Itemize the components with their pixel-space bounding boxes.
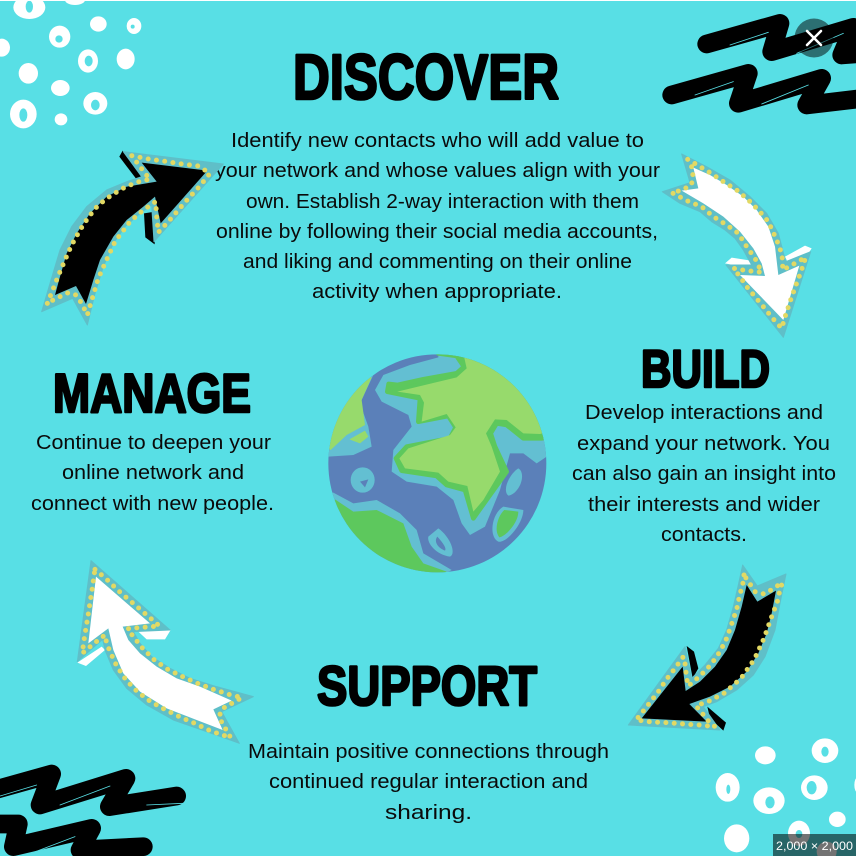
arrow: black, manage to discover <box>42 151 223 325</box>
text block: Discover description: online by following their social media accounts, <box>216 221 658 243</box>
image size badge: 2,000 × 2,000 <box>776 839 853 853</box>
text block: Build description: can also gain an insight into <box>572 463 836 485</box>
text block: Support description <box>248 741 609 824</box>
heading: Support: SUPPORT <box>317 654 537 717</box>
text block: Support description: Maintain positive connections through <box>248 741 609 763</box>
text block: Discover description: your network and whose values align with your <box>215 160 660 182</box>
arrow: white, support to manage <box>77 561 253 743</box>
close button overlay <box>794 18 834 58</box>
image size badge <box>773 834 856 856</box>
heading: Manage: MANAGE <box>53 362 251 424</box>
decorative black brush scribble: top right <box>672 23 856 105</box>
illustration: globe <box>328 354 546 572</box>
text block: Discover description: Identify new contacts who will add value to <box>231 130 644 152</box>
arrow: black, build to support <box>628 565 786 731</box>
text block: Manage description: Continue to deepen your <box>36 432 271 454</box>
text block: Discover description: activity when appropriate. <box>312 281 562 303</box>
text block: Manage description: connect with new people. <box>31 493 274 515</box>
text block: Manage description <box>31 432 274 515</box>
arrow: white, discover to build <box>662 154 812 337</box>
decorative white dots: top left <box>0 0 141 128</box>
decorative black brush scribble: bottom left <box>0 774 183 855</box>
text block: Support description: sharing. <box>385 802 472 824</box>
text block: Build description: expand your network. You <box>577 433 830 455</box>
decorative white dots: bottom right <box>716 738 856 856</box>
heading: Build: BUILD <box>641 340 770 399</box>
text block: Build description: contacts. <box>661 524 747 546</box>
text block: Discover description <box>215 130 660 303</box>
text block: Support description: continued regular interaction and <box>269 771 588 793</box>
text block: Build description: Develop interactions and <box>585 402 823 424</box>
text block: Build description: their interests and wider <box>588 494 820 516</box>
text block: Build description <box>572 402 836 546</box>
text block: Manage description: online network and <box>62 462 244 484</box>
text block: Discover description: own. Establish 2-way interaction with them <box>246 191 639 213</box>
text block: Discover description: and liking and commenting on their online <box>243 251 632 273</box>
title: Discover: DISCOVER <box>293 41 559 113</box>
